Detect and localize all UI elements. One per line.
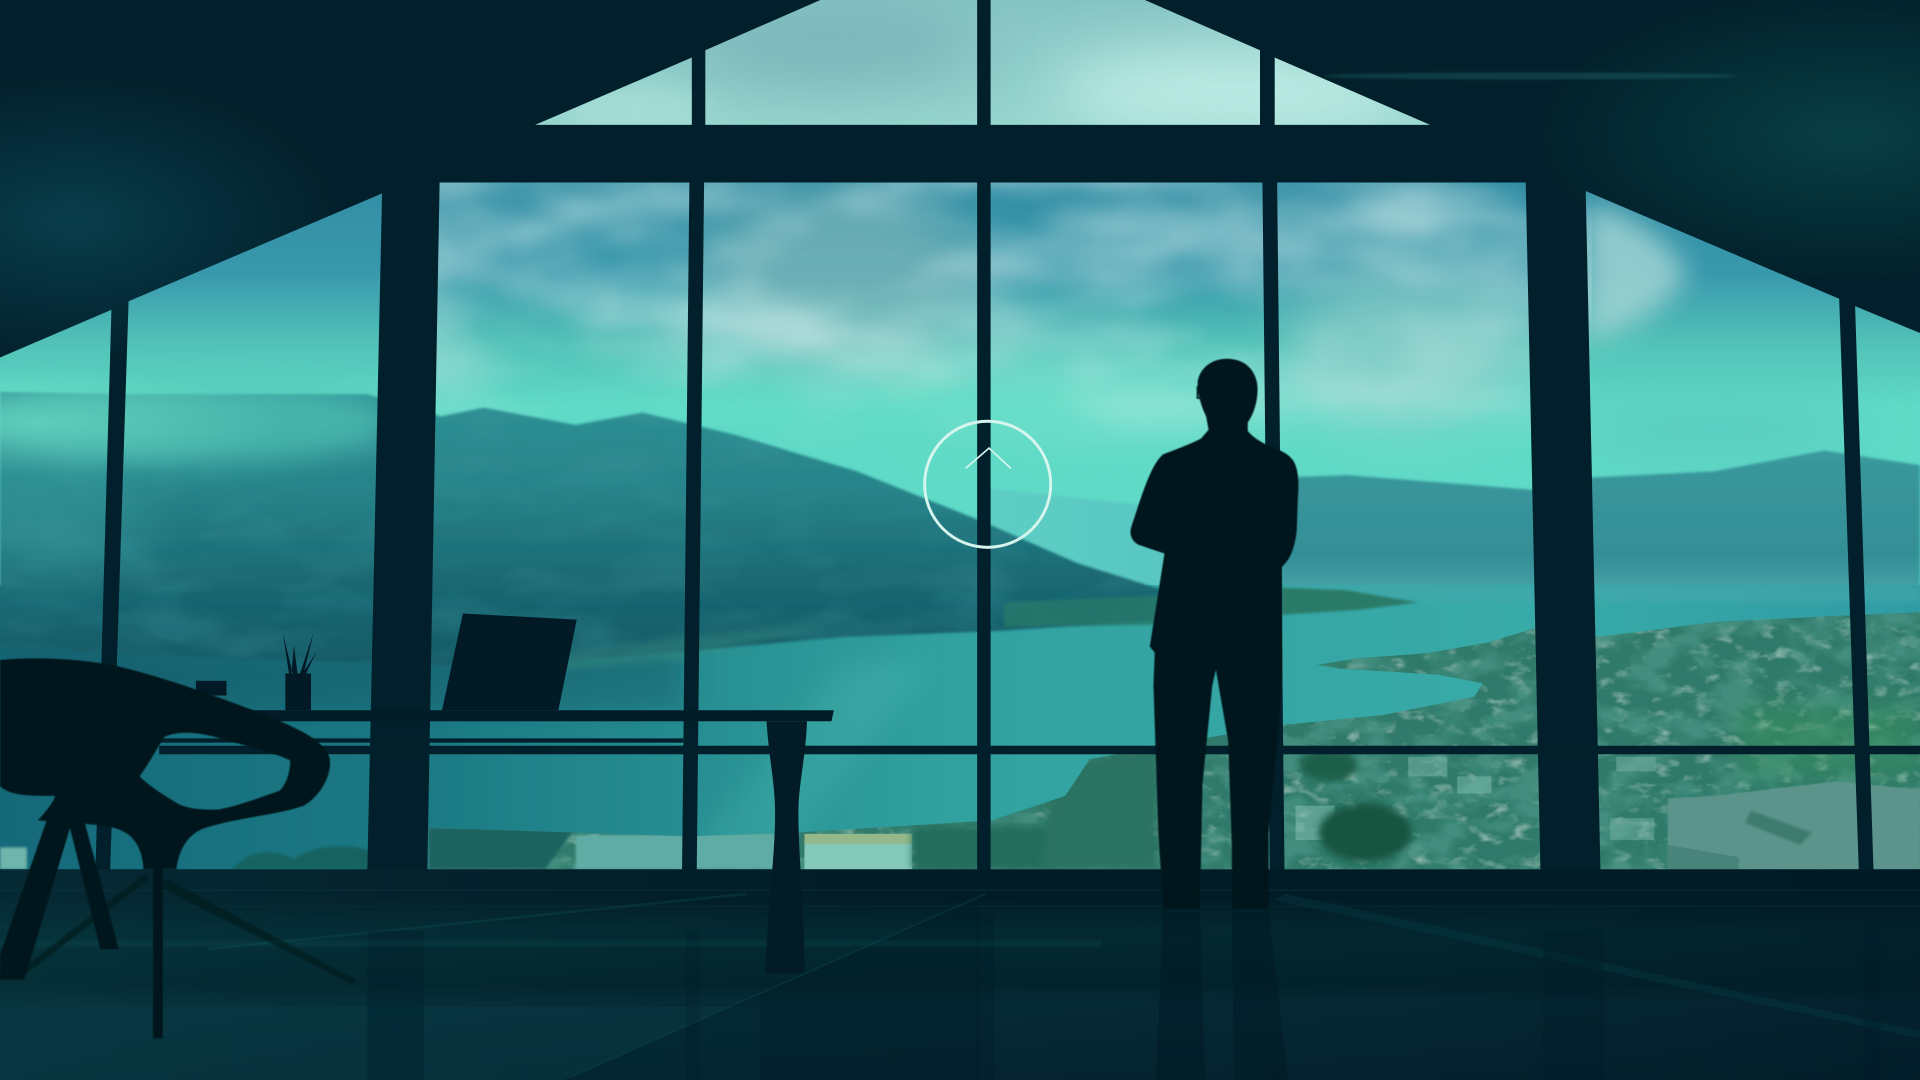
pen cup with pencils: [283, 633, 316, 710]
man's floor reflection: [1156, 912, 1288, 1080]
small trees left of pillar: [0, 846, 370, 869]
background: sky: [0, 0, 1920, 586]
silhouette: standing man with glasses: [1131, 359, 1298, 909]
mountain range left: [0, 381, 1418, 676]
light flare over landscape: [0, 343, 1322, 478]
coastal town: [416, 606, 1920, 876]
distant mountains right: [980, 451, 1920, 600]
desk with legs: [159, 710, 834, 973]
horizontal transom: [159, 738, 1920, 754]
icon: circled up chevron: [925, 421, 1051, 547]
laptop: [442, 613, 577, 710]
water: lake: [0, 585, 1920, 882]
chair: [0, 658, 355, 1038]
desk tray: [196, 681, 227, 696]
floor: [0, 869, 1920, 1080]
